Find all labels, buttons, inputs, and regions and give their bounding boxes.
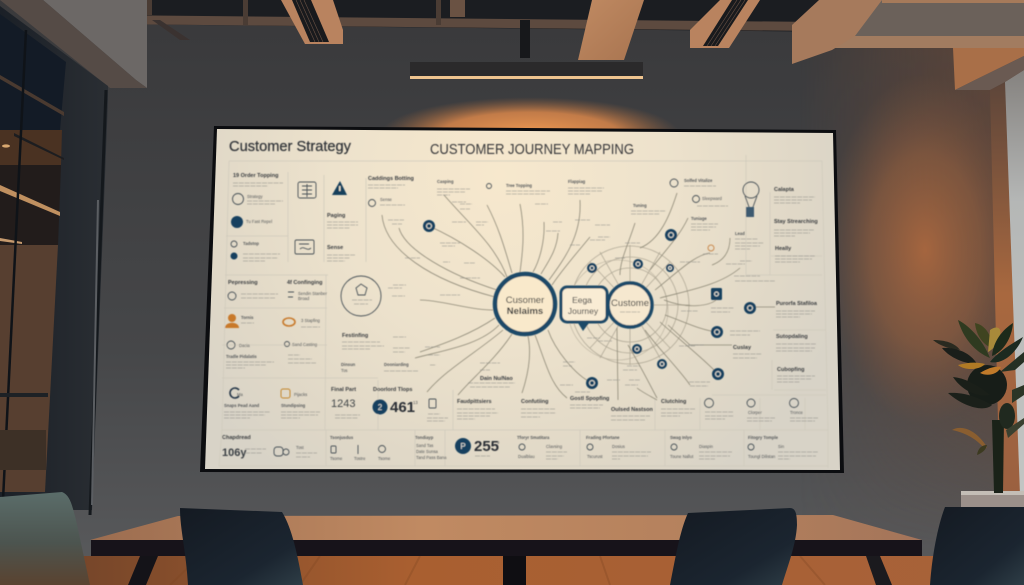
bottom strip: fading portion: Dosius [612,444,625,449]
top labels group: Tree Topping [506,183,532,188]
plant pot [961,491,1024,510]
panel: top right items: Solfed Vitalize [684,178,713,183]
bottom strip: trays: Dualblau [518,454,535,459]
panel: paging and sense: Sense [327,245,343,251]
panel: mid left: Broad [298,296,310,301]
panel: right column: Cubopfing [777,367,804,373]
wall [74,48,1014,556]
panel: right column: Sutopdaling [776,334,808,340]
panel: faudpittsiers: Faudpittsiers [457,399,492,405]
lamp [410,20,643,79]
bottom strip: swag: Diaspin [699,444,714,449]
panel: lower left lists: Sand Casting [292,342,318,347]
hub: journey callout: Journey [568,306,599,316]
bottom strip: trading steps [330,435,391,461]
wall light glow above board [360,85,700,135]
panel: bottom left items: Snaps Pead Aand [224,403,260,408]
panel: top right items: Tuniage [691,216,707,221]
circle diagram left [341,276,381,316]
bottom strip: swag: Toune Nallut [670,454,694,459]
panel: bottom mid notes: Clutching [661,399,686,405]
bottom strip: bulleted list: Sand Tas [416,443,433,448]
panel: right column: Heally [775,246,792,252]
chair: left [0,492,90,585]
icon: warning triangle [332,181,347,195]
panel: lower middle notes: Dooniarding [384,362,409,367]
stat: final part 1243: Final Part [331,387,356,393]
panel: top left strategy: Strategy [247,194,264,199]
mid right labels [679,308,762,386]
floor [0,556,1024,585]
top labels group: Flappiag [568,179,586,184]
icon: balloon [743,182,759,217]
bottom strip: bulleted list [415,435,447,460]
panel: lower middle notes: Tos [341,368,348,373]
panel: right column [774,187,818,382]
panel grid [219,155,828,468]
beam with vent right [690,0,760,48]
stat: 255: P [460,442,466,451]
dark node icons [423,220,756,389]
hub: customer needs circle [495,274,555,334]
panel: paging and sense: Caddings Botting [368,176,414,182]
bottom strip: trading steps: Tsonjusdus [330,435,354,440]
concrete beam centre [578,0,644,60]
top labels group: Tuning [633,203,647,208]
panel: top left strategy: 19 Order Topping [233,173,278,179]
board surface [205,129,840,470]
top labels group: Casping [437,179,454,184]
board content [219,138,828,468]
chair: front centre [670,508,797,585]
panel: right bottom small items: Tronce [790,410,804,415]
bottom strip: swag: Swag Inlyo [670,435,692,440]
icon: orange link: 3 Stapfing [301,318,321,323]
icon: orange link [283,318,321,327]
icon: document card [295,240,314,254]
mid right labels: Cuslay [733,345,752,351]
bottom strip: chapdread: 106y [222,447,247,459]
bottom strip: trays: Clavsing [546,444,563,449]
panel: right column: Purorfa Stafiloa [776,301,818,307]
panel: paging and sense: Paging [327,213,345,219]
panel: bottom mid notes: Gostl Spopfing [570,396,609,402]
panel: lower middle notes: Dinsun [341,362,356,367]
stat: 461: Doorlord Tlops [373,387,412,393]
panel: lower left lists: Dacia [239,343,250,348]
bottom strip: froggy temple: Fitogry Tomple [748,435,779,440]
concrete beam right and soffit [792,0,1024,90]
icon: orange person: Tornis [241,315,254,320]
stat: 461: 13 [413,400,418,405]
icon: grid card [298,182,316,198]
panel: lower left lists [226,341,318,368]
stat: 255 [455,438,500,456]
bottom strip: froggy temple [748,435,818,459]
panel: right bottom small items: Clorper [748,410,762,415]
panel: bottom mid notes: Confutiing [521,399,548,405]
hub: customer circle [608,283,652,327]
right column [990,70,1024,510]
panel: lower middle notes: Festinfing [342,333,368,339]
panel: top right items: Lead [735,231,745,236]
ceiling [100,0,840,40]
top labels group [388,179,666,296]
plant [933,320,1024,493]
panel: lower left lists: Tradle Pidalatis [226,354,257,359]
stat: 461: 461 [390,399,415,416]
stat: 255: 255 [474,438,499,455]
icon: orange person [225,314,254,328]
bottom strip: froggy temple: Sin [778,444,785,449]
table [90,515,922,585]
panel: paging and sense: Sense [380,197,393,202]
bottom strip: swag [670,435,732,459]
panel: mid left: Pepressing [228,280,258,286]
bottom strip: trays: Tforyr Smatitara [517,435,550,440]
stat: 461: 2 [378,403,383,412]
panel: paging and sense [327,176,414,261]
panel: top left strategy: Tu Fast Repel [246,219,272,224]
stat: 255: 9 [497,440,500,445]
bottom strip: chapdread: Chapdread [222,435,251,441]
panel: right column: Calapta [774,187,795,193]
bottom strip: trading steps: Tostre [354,456,366,461]
stat: 461 [372,387,418,416]
panel: bottom mid notes: Oulsed Nastson [611,407,654,413]
chair: front left [180,508,303,585]
bottom strip: chapdread [222,435,317,459]
bottom strip: froggy temple: Toungl Dilistan [748,454,776,459]
title: customer strategy: Customer Strategy [229,138,351,155]
panel: bottom left items: Pijacks [294,392,307,397]
panel: bottom mid notes [521,338,695,420]
panel: right bottom small items [704,398,818,421]
hub: customer needs circle: Cusomer [506,295,544,306]
title: customer journey mapping: CUSTOMER JOURNEY MAPPING [430,142,634,158]
bottom strip: bulleted list: Date Sunsa [416,449,439,454]
panel: top right items: Sleepward [702,196,722,201]
stat: final part 1243: 1243 [331,398,355,410]
concentric arcs [568,245,690,365]
panel: top left strategy [230,173,283,261]
bottom strip: fading portion: Frading Pfortane [586,435,620,440]
panel: lower middle notes [341,333,515,387]
panel: lower middle notes: Dain Nu/Nao [480,376,513,382]
bottom strip: fading portion: Tscurust [587,454,603,459]
connector lines [382,193,775,400]
panel: faudpittsiers [427,399,498,421]
stat: final part 1243 [331,387,360,418]
panel: top left strategy: Tadstop [243,241,259,246]
hub: customer needs circle: Nelaims [507,306,543,317]
panel: top right items [670,178,775,281]
beam with vent left [281,0,343,44]
soffit: upper left [0,0,147,88]
chair: front right [930,507,1024,585]
bottom strip: bulleted list: Tand Pass Bana [416,455,447,460]
hub: customer circle: Custome [611,298,649,309]
panel: mid left: Sendin Stanber [298,291,327,296]
panel: mid left: 4f Confinging [287,280,322,286]
bottom strip: chapdread: Tost [296,445,305,450]
board frame [200,126,844,473]
panel: bottom left items [224,388,320,418]
bottom strip: trading steps: Tsome [330,456,343,461]
panel: right column: Stay Strearching [774,219,818,225]
bottom strip: trading steps: Tsome [378,456,391,461]
panel: bottom left items: Stundipsing [281,403,306,408]
hub: journey callout [561,287,607,331]
bottom strip: fading portion [586,435,651,459]
bottom strip: bulleted list: Tondiayp [415,435,434,440]
bottom strip: trays [517,435,567,459]
panel: mid left [228,280,327,301]
hub: journey callout: Eega [572,295,592,305]
panel: bottom left items: Ma [237,392,243,397]
window [0,6,108,515]
